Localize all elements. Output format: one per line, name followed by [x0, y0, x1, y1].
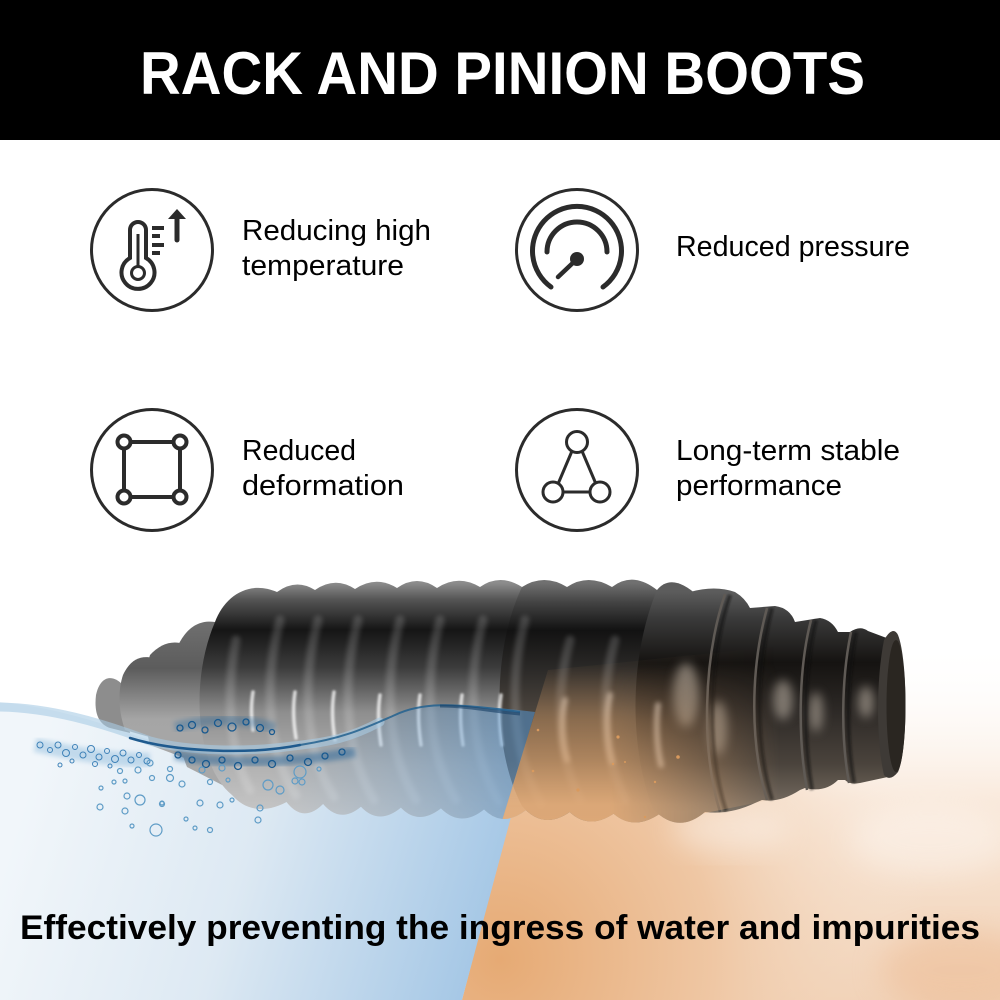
feature: reducing high temperature [92, 190, 431, 310]
boot: open end [878, 631, 906, 778]
boot: dust tint [502, 666, 770, 823]
feature: long-term stable performance: performance [676, 470, 842, 502]
boot: underwater tint [318, 706, 535, 819]
feature: reduced deformation [92, 410, 404, 530]
water surface and splash [0, 705, 520, 761]
bottom caption: Effectively preventing the ingress of water and impurities [20, 909, 980, 947]
title: RACK AND PINION BOOTS [140, 40, 865, 107]
background: dust cloud [462, 717, 1000, 1000]
label: Long-term stable [676, 435, 900, 467]
label: Reduced [242, 435, 356, 467]
icon: pressure gauge [516, 190, 638, 310]
icon: square with corner nodes [92, 410, 212, 530]
collar highlights [673, 663, 874, 755]
rack and pinion boot [96, 580, 906, 823]
background: water body [0, 690, 545, 1000]
label: Reducing high [242, 215, 431, 247]
feature: long-term stable performance [516, 410, 900, 530]
splash foam bubbles [37, 719, 345, 770]
feature: reduced deformation: deformation [242, 470, 404, 502]
boot: dust specks [532, 729, 680, 818]
boot: stepped collar [673, 588, 906, 813]
feature: reduced pressure [516, 190, 910, 310]
icon: triangle with nodes [516, 410, 638, 530]
feature: reducing high temperature: temperature [242, 250, 404, 282]
header bar [0, 0, 1000, 140]
boot: highlights [230, 620, 661, 804]
bubbles [97, 760, 321, 836]
boot: tapered left end [96, 622, 232, 790]
label: Reduced pressure [676, 231, 910, 263]
icon: thermometer with up arrow [92, 190, 212, 310]
boot: corrugated ribs [200, 580, 705, 823]
boot: rim lines [707, 594, 856, 812]
